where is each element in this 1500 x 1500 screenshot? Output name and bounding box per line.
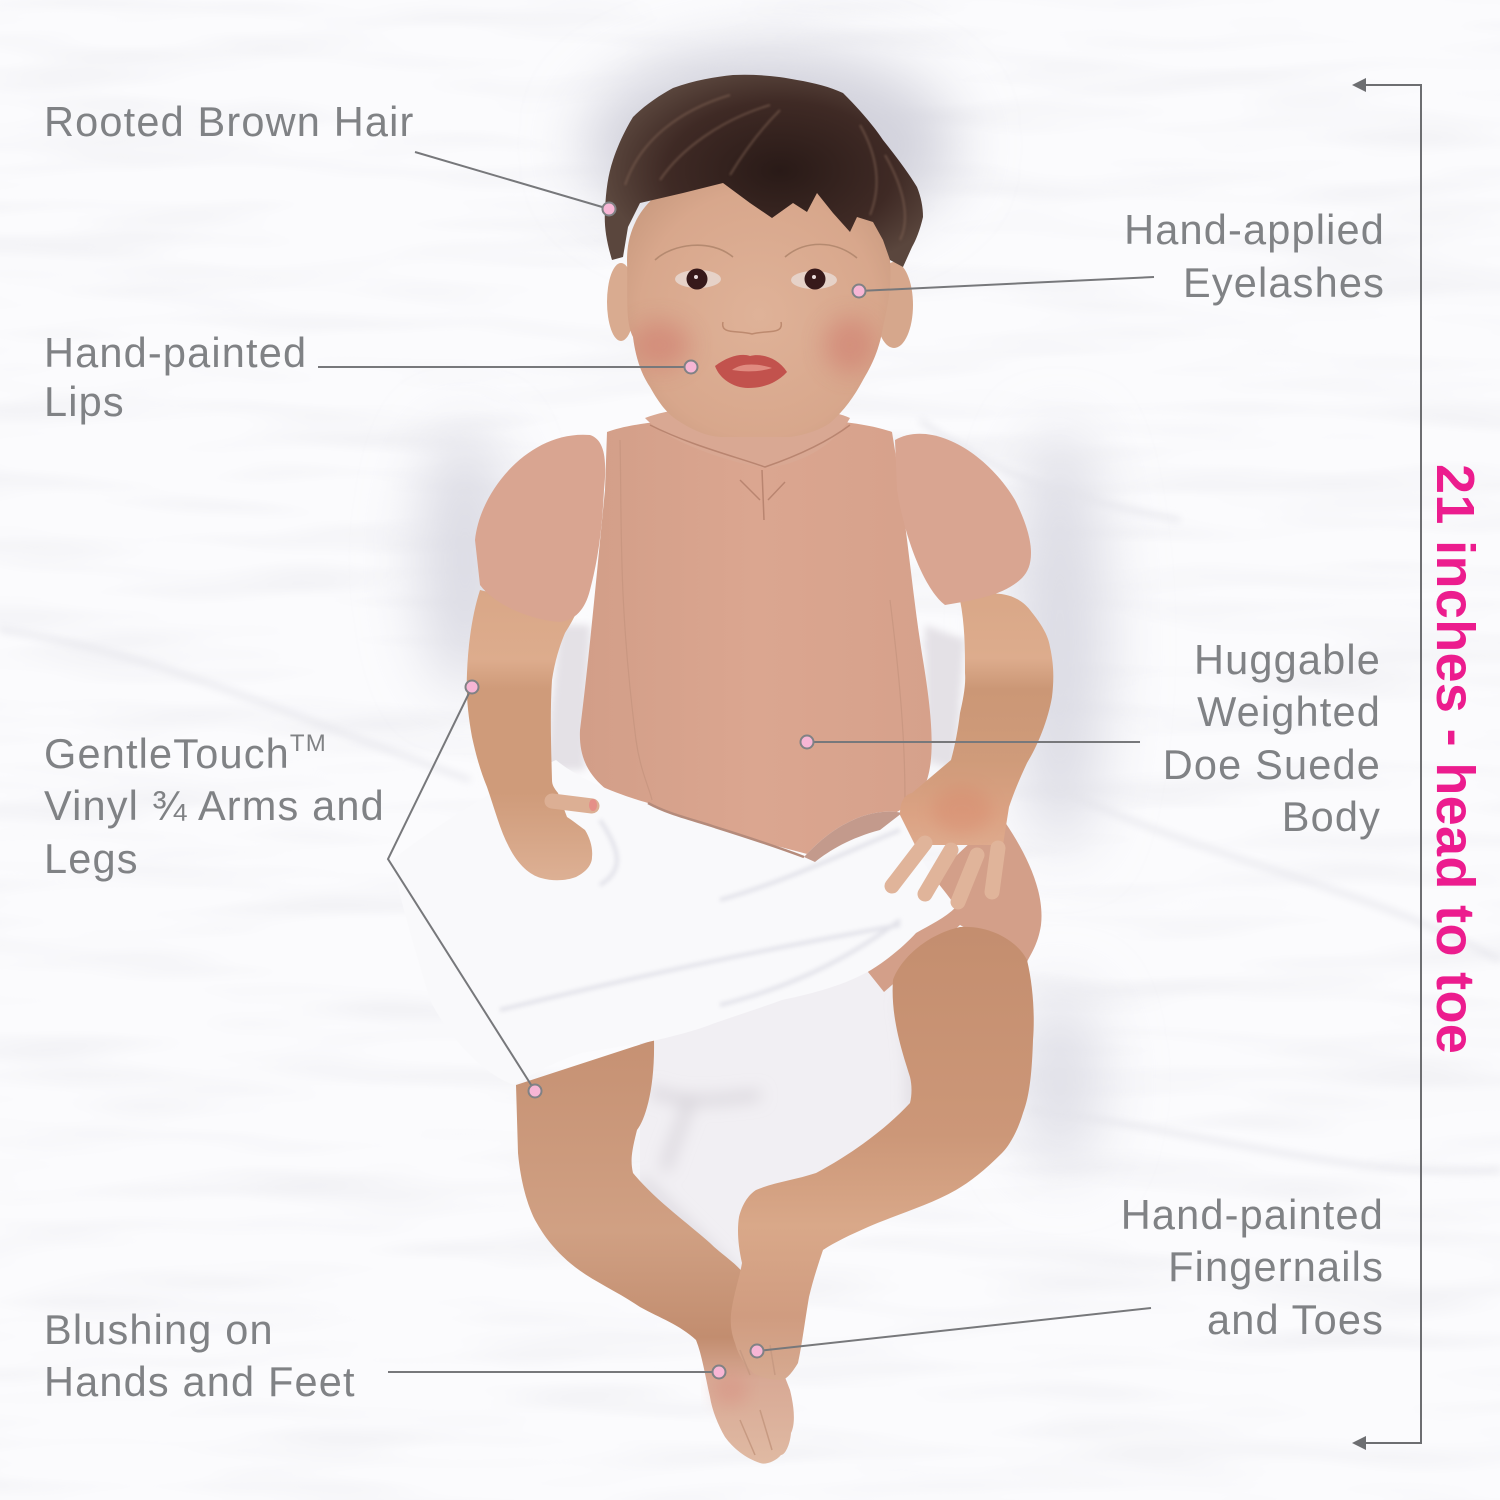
right hand fingers xyxy=(892,843,998,902)
left hand finger xyxy=(552,801,592,806)
hair xyxy=(605,75,923,267)
label: hand-painted lips: Hand-painted xyxy=(44,329,307,376)
nose xyxy=(723,322,781,334)
label: fingernails and toes: Hand-painted xyxy=(1121,1191,1384,1238)
label: huggable body: Doe Suede xyxy=(1163,741,1381,788)
hair strands xyxy=(625,95,905,240)
label: huggable body: Weighted xyxy=(1197,688,1381,735)
toes left foot xyxy=(740,1345,775,1455)
left leg xyxy=(516,1040,794,1464)
right hand blush xyxy=(932,786,992,834)
label: huggable body: Body xyxy=(1282,793,1381,840)
doll xyxy=(392,75,1053,1464)
right leg xyxy=(731,927,1034,1380)
eyes xyxy=(675,268,837,290)
label: fingernails and toes xyxy=(1121,1191,1384,1343)
label: huggable body xyxy=(1163,636,1381,840)
height label: 21 inches - head to toe xyxy=(1425,464,1485,1054)
label: hand-painted lips: Lips xyxy=(44,378,125,425)
neck shadow xyxy=(645,404,850,468)
marker dots xyxy=(466,202,866,1378)
height bracket with arrows xyxy=(1352,78,1421,1450)
right sleeve xyxy=(895,434,1031,605)
line: eyelashes xyxy=(859,277,1154,291)
line: rooted brown hair xyxy=(415,152,609,209)
label: huggable body: Huggable xyxy=(1194,636,1381,683)
gap shadow between arms and torso xyxy=(545,625,965,770)
line: blushing xyxy=(388,1371,719,1373)
under-blanket area xyxy=(640,960,925,1290)
label: gentletouch vinyl: Vinyl ¾ Arms and xyxy=(44,782,385,829)
label: blushing: Hands and Feet xyxy=(44,1358,356,1405)
label: blushing: Blushing on xyxy=(44,1306,274,1353)
right arm xyxy=(900,593,1053,845)
line: arms and legs xyxy=(388,687,535,1091)
label: gentletouch vinyl: TM xyxy=(290,730,327,757)
cheeks xyxy=(630,317,876,373)
waist shadow xyxy=(804,812,902,862)
right ear xyxy=(875,262,913,348)
diaper xyxy=(868,815,1042,992)
label: fingernails and toes: and Toes xyxy=(1207,1296,1384,1343)
left sleeve xyxy=(475,435,605,622)
line: fingernails xyxy=(757,1308,1151,1351)
line: body xyxy=(807,741,1140,743)
label: hand-painted lips xyxy=(44,329,307,425)
blanket folds xyxy=(500,820,900,1010)
left arm xyxy=(467,590,592,880)
brows xyxy=(655,244,857,260)
label: hand-applied eyelashes xyxy=(1124,206,1385,306)
label: hand-applied eyelashes: Eyelashes xyxy=(1183,259,1385,306)
label: gentletouch vinyl: GentleTouch xyxy=(44,730,290,777)
label: blushing xyxy=(44,1306,356,1405)
label: rooted brown hair: Rooted Brown Hair xyxy=(44,98,414,145)
label: gentletouch vinyl: Legs xyxy=(44,835,139,882)
connector lines xyxy=(318,152,1154,1372)
left hand nail xyxy=(589,799,597,811)
left ear xyxy=(607,263,635,341)
face xyxy=(627,165,891,437)
label: fingernails and toes: Fingernails xyxy=(1168,1243,1384,1290)
blanket xyxy=(392,760,956,1085)
foot blush xyxy=(712,1374,748,1406)
lips xyxy=(715,355,787,388)
torso xyxy=(580,417,932,860)
label: gentletouch vinyl xyxy=(44,730,385,882)
torso seams xyxy=(620,440,905,800)
line: lips xyxy=(318,366,691,368)
label: hand-applied eyelashes: Hand-applied xyxy=(1124,206,1385,253)
